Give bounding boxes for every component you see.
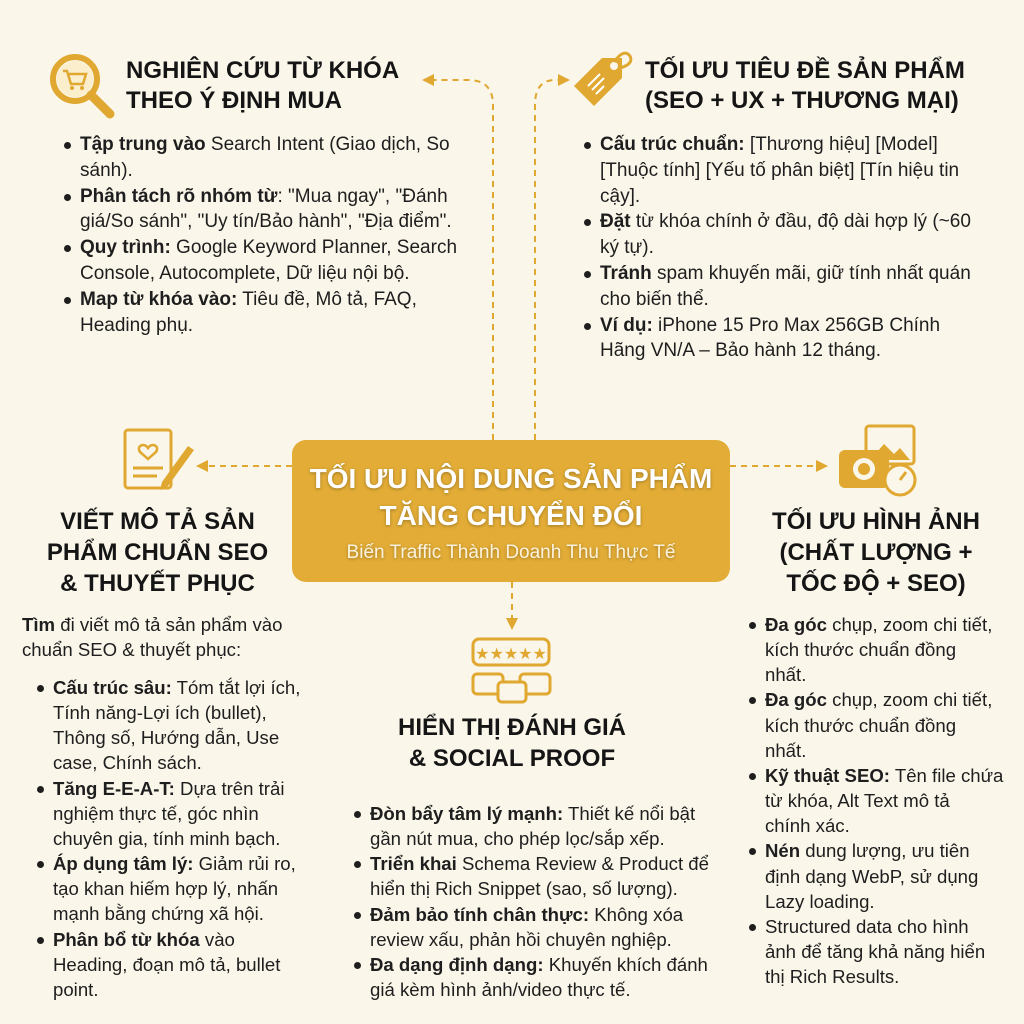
list: images: Kỹ thuật SEO: Tên file chứa — [765, 765, 1003, 786]
list: keyword research: Map từ khóa vào: Tiêu đề, Mô tả, FAQ, Heading phụ. — [80, 289, 417, 336]
list: description: Áp dụng tâm lý: Giảm rủi ro, — [53, 853, 296, 874]
list: images: ảnh để tăng khả năng hiển — [765, 941, 985, 962]
list: images: định dạng WebP, sử dụng — [765, 866, 978, 887]
list: images: chính xác. — [765, 815, 850, 836]
list: description: Heading, đoạn mô tả, bullet — [53, 954, 280, 975]
center box: TĂNG CHUYỂN ĐỔI — [380, 500, 642, 531]
list: description: Tăng E-E-A-T: Dựa trên trải — [53, 778, 284, 799]
list: images: nhất. — [765, 664, 806, 685]
text: description intro: Tìm đi viết mô tả sản phẩm vào — [22, 614, 282, 635]
list: images: thị Rich Results. — [765, 966, 899, 987]
list: reviews: gần nút mua, cho phép lọc/sắp xếp. — [370, 828, 665, 849]
list: description — [37, 677, 300, 1000]
list: reviews: review xấu, phản hồi chuyên nghiệp. — [370, 929, 672, 950]
center box — [292, 440, 730, 582]
title: reviews: & SOCIAL PROOF — [409, 745, 615, 772]
list: reviews: Triển khai Schema Review & Product để — [370, 853, 709, 874]
list: images: từ khóa, Alt Text mô tả — [765, 790, 950, 811]
list: description: Thông số, Hướng dẫn, Use — [53, 727, 279, 748]
list: images — [749, 614, 1004, 987]
title: keyword research: THEO Ý ĐỊNH MUA — [126, 87, 342, 114]
title: description: & THUYẾT PHỤC — [60, 570, 255, 597]
list: product title: Tránh spam khuyến mãi, giữ tính nhất quán cho biến thể. — [600, 263, 971, 310]
title: reviews: HIỂN THỊ ĐÁNH GIÁ — [398, 714, 626, 741]
title: images — [772, 507, 980, 597]
icon: camera image gauge — [839, 424, 916, 496]
title: images: TỐI ƯU HÌNH ẢNH — [772, 508, 980, 535]
list: images: kích thước chuẩn đồng — [765, 715, 956, 736]
list: images: Lazy loading. — [765, 891, 875, 912]
list: images: Nén dung lượng, ưu tiên — [765, 840, 970, 861]
list: description: nghiệm thực tế, góc nhìn — [53, 803, 259, 824]
list: description: Tính năng-Lợi ích (bullet), — [53, 702, 267, 723]
center box: Biến Traffic Thành Doanh Thu Thực Tế — [347, 542, 675, 563]
title: product title: TỐI ƯU TIÊU ĐỀ SẢN PHẨM — [645, 57, 965, 84]
icon: review stars chat: ★★★★★ — [475, 646, 547, 663]
title: description — [47, 507, 268, 597]
title: description: VIẾT MÔ TẢ SẢN — [60, 508, 255, 535]
list: description: mạnh bằng chứng xã hội. — [53, 903, 264, 924]
list: description: point. — [53, 979, 98, 1000]
title: reviews — [398, 714, 626, 772]
list: product title — [584, 134, 971, 361]
icon: review stars chat — [472, 638, 552, 704]
title: images: TỐC ĐỘ + SEO) — [786, 570, 966, 597]
list: keyword research: Quy trình: Google Keyword Planner, Search Console, Autocomplete, Dữ liệu nội bộ. — [80, 237, 457, 284]
list: keyword research: Tập trung vào Search Intent (Giao dịch, So sánh). — [80, 134, 450, 181]
list: reviews: Đảm bảo tính chân thực: Không xóa — [370, 904, 683, 925]
icon: price tag — [574, 52, 632, 106]
icon: magnifier cart — [50, 54, 114, 118]
list: images: Structured data cho hình — [765, 916, 969, 937]
text: description intro — [22, 614, 282, 660]
list: images: Đa góc chụp, zoom chi tiết, — [765, 689, 992, 710]
title: keyword research — [126, 56, 399, 114]
title: description: PHẨM CHUẨN SEO — [47, 539, 268, 566]
title: keyword research: NGHIÊN CỨU TỪ KHÓA — [126, 57, 399, 84]
text: description intro: chuẩn SEO & thuyết phục: — [22, 639, 241, 660]
list: reviews: giá kèm hình ảnh/video thực tế. — [370, 979, 631, 1000]
list: reviews: Đa dạng định dạng: Khuyến khích đánh — [370, 954, 708, 975]
list: description: tạo khan hiếm hợp lý, nhấn — [53, 878, 278, 899]
title: product title — [645, 56, 965, 114]
list: description: chuyên gia, tính minh bạch. — [53, 828, 280, 849]
list: reviews: hiển thị Rich Snippet (sao, số lượng). — [370, 878, 678, 899]
list: description: case, Chính sách. — [53, 752, 202, 773]
list: images: Đa góc chụp, zoom chi tiết, — [765, 614, 992, 635]
title: images: (CHẤT LƯỢNG + — [779, 539, 973, 566]
title: product title: (SEO + UX + THƯƠNG MẠI) — [645, 87, 959, 114]
list: product title: Ví dụ: iPhone 15 Pro Max 256GB Chính Hãng VN/A – Bảo hành 12 tháng. — [600, 315, 940, 361]
list: product title: Đặt từ khóa chính ở đầu, độ dài hợp lý (~60 ký tự). — [600, 211, 971, 258]
list: product title: [Thuộc tính] [Yếu tố phân biệt] [Tín hiệu tin cậy]. — [600, 160, 959, 207]
list: reviews — [354, 803, 709, 1000]
center box: TỐI ƯU NỘI DUNG SẢN PHẨM — [310, 463, 712, 494]
list: description: Phân bổ từ khóa vào — [53, 929, 235, 950]
icon: document pen — [124, 428, 194, 490]
list: images: kích thước chuẩn đồng — [765, 639, 956, 660]
list: keyword research: Phân tách rõ nhóm từ: "Mua ngay", "Đánh giá/So sánh", "Uy tín/Bảo hành", "Địa điểm". — [80, 186, 452, 232]
list: keyword research — [64, 134, 457, 336]
list: images: nhất. — [765, 740, 806, 761]
list: product title: Cấu trúc chuẩn: [Thương hiệu] [Model] — [600, 134, 938, 155]
list: reviews: Đòn bẩy tâm lý mạnh: Thiết kế nổi bật — [370, 803, 695, 824]
list: description: Cấu trúc sâu: Tóm tắt lợi ích, — [53, 677, 300, 698]
